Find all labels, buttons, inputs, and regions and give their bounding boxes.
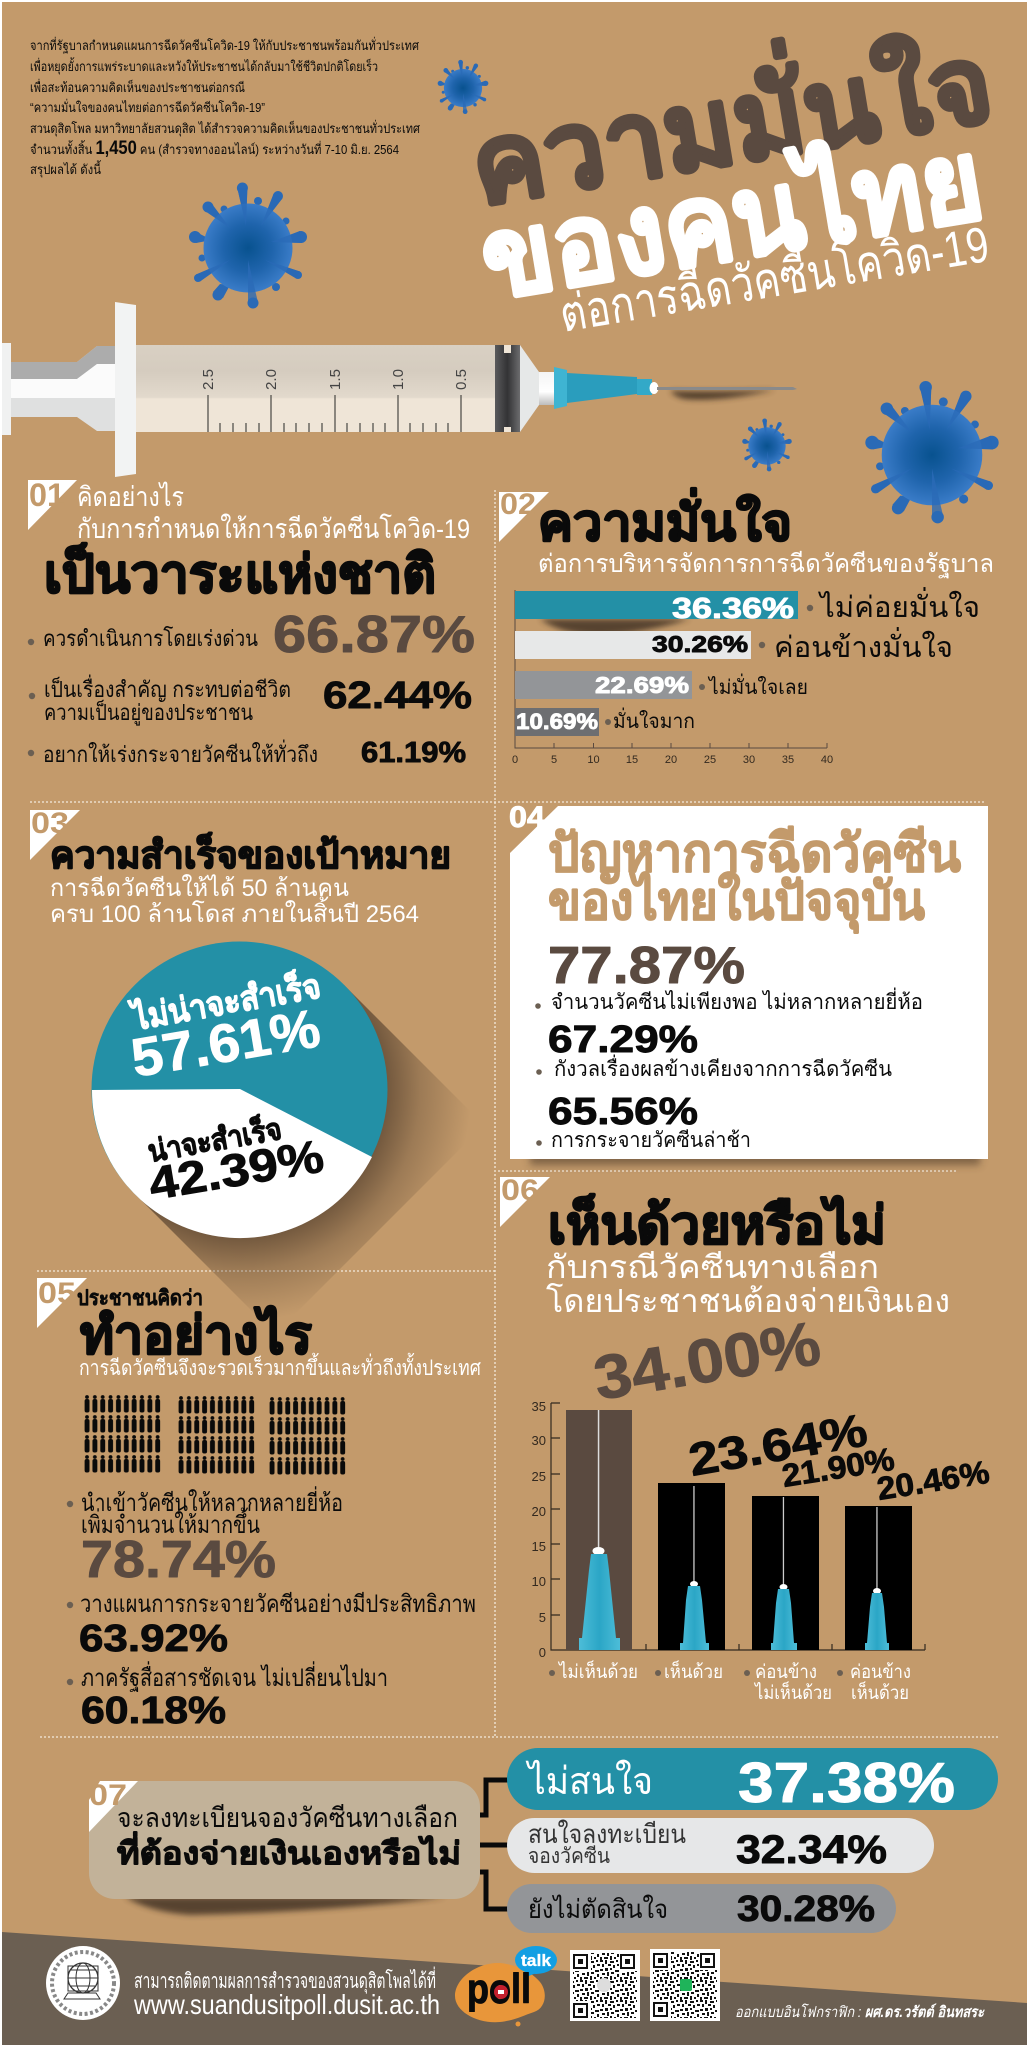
axis labels: 35 — [782, 754, 794, 766]
intro text block: สวนดุสิตโพล มหาวิทยาลัยสวนดุสิต ได้สำรวจความคิดเห็นของประชาชนทั่วประเทศ — [30, 119, 421, 137]
pill 37.38%: ไม่สนใจ — [525, 1760, 653, 1803]
pie label: not likely: ไม่น่าจะสำเร็จ — [127, 965, 324, 1038]
item 61.19% — [28, 737, 466, 769]
badge 02: 02 — [500, 488, 536, 521]
badge 04: 04 — [509, 801, 545, 834]
panel 07: registration — [89, 1748, 998, 1933]
panel 04: current problems — [509, 801, 988, 1165]
bar chart: confidence — [512, 587, 980, 766]
panel 06: agree or not — [500, 1174, 992, 1704]
bar 30.26 — [515, 627, 953, 664]
pie label: not likely — [127, 965, 324, 1089]
subheading 05: การฉีดวัคซีนจึงจะรวดเร็วมากขึ้นและทั่วถึงทั้งประเทศ — [79, 1353, 482, 1380]
item 63.92% — [67, 1591, 476, 1660]
heading 06: เห็นด้วยหรือไม่ — [548, 1194, 886, 1255]
bar 10.69 — [515, 707, 695, 736]
intro text block: “ความมั่นใจของคนไทยต่อการฉีดวัคซีนโควิด-19” — [30, 99, 265, 115]
connectors — [480, 1780, 509, 1909]
item 67.29% — [536, 1019, 892, 1081]
bar chart: agree or not — [532, 1309, 992, 1704]
heading 03: ความสำเร็จของเป้าหมาย — [50, 832, 451, 877]
panel 05: what should be done — [37, 1277, 482, 1732]
subheading 06 — [546, 1249, 950, 1319]
bar 10.69: 10.69% — [516, 709, 598, 734]
badge 03 — [30, 807, 80, 860]
item 61.19%: อยากให้เร่งกระจายวัคซีนให้ทั่วถึง — [43, 739, 318, 767]
axis labels: 20 — [665, 754, 677, 766]
bar 30.26: ค่อนข้างมั่นใจ — [774, 627, 953, 664]
syringe illustration: 2.5 — [200, 369, 217, 390]
value 34.00%: 34.00% — [589, 1309, 825, 1414]
syringe illustration: 1.5 — [327, 369, 344, 390]
pill 32.34%: 32.34% — [736, 1828, 887, 1872]
bar: rather agree — [845, 1506, 912, 1650]
question text: จะลงทะเบียนจองวัคซีนทางเลือก — [117, 1803, 458, 1833]
bar 36.36 — [515, 587, 980, 625]
question text: ที่ต้องจ่ายเงินเองหรือไม่ — [117, 1831, 461, 1871]
item 60.18%: 60.18% — [81, 1690, 226, 1732]
bar 10.69: มั่นใจมาก — [613, 707, 695, 733]
icon: small virus lower — [742, 418, 792, 471]
badge 06: 06 — [501, 1174, 539, 1207]
axes — [551, 1403, 925, 1650]
bar 22.69 — [515, 671, 808, 699]
badge 05: 05 — [38, 1277, 76, 1310]
category labels: ค่อนข้าง — [850, 1662, 911, 1683]
panel 02: confidence in government — [499, 488, 994, 766]
intro text block: เพื่อหยุดยั้งการแพร่ระบาดและหวังให้ประชาชนได้กลับมาใช้ชีวิตปกติโดยเร็ว — [30, 57, 378, 75]
heading 01 small: คิดอย่างไร — [77, 482, 184, 512]
subheading 02: ต่อการบริหารจัดการการฉีดวัคซีนของรัฐบาล — [538, 550, 994, 578]
syringe illustration: 0.5 — [453, 369, 470, 390]
pie label: likely: น่าจะสำเร็จ — [145, 1110, 284, 1169]
syringe illustration — [2, 302, 797, 477]
item 66.87%: 66.87% — [273, 606, 475, 664]
pill 30.28% — [507, 1884, 896, 1933]
item 67.29%: กังวลเรื่องผลข้างเคียงจากการฉีดวัคซีน — [554, 1054, 892, 1081]
bar chart: agree or not: 15 — [532, 1539, 546, 1554]
heading 04: ปัญหาการฉีดวัคซีน — [548, 825, 961, 884]
icon: university seal — [46, 1946, 120, 2020]
pie label: likely — [145, 1110, 327, 1210]
heading 01 small: กับการกำหนดให้การฉีดวัคซีนโควิด-19 — [77, 513, 470, 544]
value 23.64%: 23.64% — [685, 1403, 871, 1486]
item 62.44%: ความเป็นอยู่ของประชาชน — [44, 698, 253, 726]
QR code 2 — [650, 1949, 720, 2021]
axis labels: 40 — [821, 754, 833, 766]
footer text: สามารถติดตามผลการสำรวจของสวนดุสิตโพลได้ที่ — [134, 1966, 436, 1994]
bar: not agree — [566, 1410, 632, 1650]
pill 32.34%: สนใจลงทะเบียน — [528, 1819, 686, 1849]
icon: small virus top — [438, 60, 488, 114]
item 78.74%: เพิ่มจำนวนให้มากขึ้น — [81, 1507, 260, 1539]
category labels: ค่อนข้าง — [755, 1662, 817, 1683]
bar 30.26: 30.26% — [652, 631, 748, 657]
item 78.74% — [67, 1486, 343, 1589]
bar: agree — [658, 1483, 725, 1650]
icon: poll talk logo: talk — [521, 1951, 552, 1970]
pie chart — [92, 942, 484, 1334]
item 63.92%: 63.92% — [79, 1618, 228, 1660]
axis labels: 15 — [626, 754, 638, 766]
item 62.44% — [29, 674, 472, 726]
syringe illustration: 2.0 — [263, 369, 280, 390]
item 62.44%: 62.44% — [323, 675, 472, 717]
title line 1: ความมั่นใจ — [460, 6, 1001, 229]
item 77.87%: 77.87% — [548, 937, 745, 995]
pie label: likely: 42.39% — [145, 1130, 327, 1210]
pill 32.34%: จองวัคซีน — [528, 1845, 610, 1868]
heading 04 — [548, 825, 961, 934]
item 67.29%: 67.29% — [548, 1019, 698, 1061]
badge 01 — [28, 477, 77, 530]
bar chart: agree or not: 5 — [539, 1610, 546, 1625]
item 66.87%: ควรดำเนินการโดยเร่งด่วน — [43, 626, 258, 651]
icon: crowd of people — [84, 1395, 347, 1476]
category labels: เห็นด้วย — [851, 1680, 909, 1704]
icon: large virus left — [189, 182, 307, 308]
pill 37.38%: 37.38% — [738, 1751, 955, 1815]
badge 01: 01 — [29, 477, 65, 513]
axis labels — [512, 754, 833, 766]
category labels: ไม่เห็นด้วย — [753, 1680, 832, 1704]
pill 32.34% — [507, 1818, 934, 1873]
item 63.92%: วางแผนการกระจายวัคซีนอย่างมีประสิทธิภาพ — [80, 1591, 476, 1618]
axis labels: 10 — [587, 754, 600, 766]
heading 04: ของไทยในปัจจุบัน — [548, 871, 925, 934]
category labels: ไม่เห็นด้วย — [557, 1659, 638, 1683]
bar chart: agree or not: 20 — [532, 1504, 546, 1519]
item 65.56%: 65.56% — [548, 1091, 698, 1133]
question text — [117, 1803, 461, 1871]
bar 22.69: 22.69% — [595, 672, 689, 698]
pie label: not likely: 57.61% — [127, 998, 324, 1089]
title line 2: ของคนไทย — [472, 116, 991, 323]
heading 05 small: ประชาชนคิดว่า — [77, 1287, 203, 1310]
footer band — [2, 1932, 1027, 2045]
subheading 03: การฉีดวัคซีนให้ได้ 50 ล้านคน — [50, 874, 349, 902]
designer credit: ออกแบบอินโฟกราฟิก : ผศ.ดร.วรัตต์ อินทสระ — [735, 2003, 985, 2021]
icon: poll talk logo — [455, 1946, 557, 2026]
badge 07: 07 — [89, 1779, 127, 1812]
item 61.19%: 61.19% — [361, 737, 466, 769]
intro text block — [30, 37, 421, 178]
icon: large virus right — [865, 381, 999, 523]
item 62.44%: เป็นเรื่องสำคัญ กระทบต่อชีวิต — [44, 674, 291, 702]
heading 01 small — [77, 482, 470, 544]
footer text — [133, 1966, 440, 2020]
QR code 1 — [570, 1950, 640, 2021]
item 77.87%: จำนวนวัคซีนไม่เพียงพอ ไม่หลากหลายยี่ห้อ — [551, 987, 923, 1014]
subheading 06: กับกรณีวัคซีนทางเลือก — [546, 1249, 879, 1285]
badge 07 — [89, 1779, 138, 1832]
axis labels: 25 — [704, 754, 716, 766]
axis labels: 5 — [551, 754, 557, 766]
item 77.87% — [535, 937, 923, 1014]
intro text block: จากที่รัฐบาลกำหนดแผนการฉีดวัคซีนโควิด-19 ให้กับประชาชนพร้อมกันทั่วประเทศ — [30, 37, 420, 54]
dotted dividers — [30, 490, 998, 1737]
intro text block: สรุปผลได้ ดังนี้ — [30, 160, 101, 178]
axis labels: 0 — [512, 754, 518, 766]
footer text: www.suandusitpoll.dusit.ac.th — [133, 1989, 440, 2020]
item 60.18%: ภาครัฐสื่อสารชัดเจน ไม่เปลี่ยนไปมา — [81, 1661, 388, 1692]
heading 05 main: ทำอย่างไร — [80, 1305, 312, 1365]
intro text block: เพื่อสะท้อนความคิดเห็นของประชาชนต่อกรณี — [30, 78, 245, 95]
item 66.87% — [28, 606, 475, 664]
value 21.90%: 21.90% — [779, 1441, 897, 1494]
axis labels: 30 — [743, 754, 755, 766]
pill 30.28%: 30.28% — [737, 1888, 875, 1929]
heading 01 main: เป็นวาระแห่งชาติ — [44, 543, 436, 604]
bar chart: agree or not: 35 — [532, 1399, 546, 1414]
bar 22.69: ไม่มั่นใจเลย — [707, 673, 808, 699]
badge 02 — [499, 488, 549, 542]
syringe illustration: 1.0 — [390, 369, 407, 390]
item 65.56%: การกระจายวัคซีนล่าช้า — [551, 1129, 751, 1152]
bar chart: agree or not: 30 — [532, 1433, 546, 1448]
bar chart: agree or not: 25 — [532, 1469, 546, 1484]
bar chart: agree or not: 0 — [539, 1645, 546, 1660]
badge 05 — [37, 1277, 87, 1328]
item 65.56% — [536, 1091, 751, 1152]
subheading 03: ครบ 100 ล้านโดส ภายในสิ้นปี 2564 — [50, 896, 419, 928]
subheading 03 — [50, 874, 419, 928]
category labels — [549, 1659, 911, 1704]
bar chart: agree or not: 10 — [532, 1574, 546, 1589]
bar 36.36: ไม่ค่อยมั่นใจ — [818, 587, 980, 624]
intro text block: จำนวนทั้งสิ้น 1,450 คน (สำรวจทางออนไลน์) ระหว่างวันที่ 7-10 มิ.ย. 2564 — [30, 138, 399, 159]
badge 03: 03 — [31, 807, 69, 840]
bar: rather not agree — [752, 1496, 819, 1650]
heading 02: ความมั่นใจ — [538, 488, 792, 551]
badge 06 — [500, 1174, 550, 1227]
icon: poll talk logo: poll — [467, 1965, 531, 2012]
value 20.46%: 20.46% — [874, 1454, 992, 1507]
panel 03: goal success — [30, 807, 484, 1334]
item 78.74%: นำเข้าวัคซีนให้หลากหลายยี่ห้อ — [81, 1486, 343, 1517]
category labels: เห็นด้วย — [664, 1659, 723, 1683]
bar 36.36: 36.36% — [672, 593, 794, 625]
item 60.18% — [67, 1661, 388, 1732]
item 78.74%: 78.74% — [81, 1531, 276, 1589]
panel 01: national agenda — [28, 477, 475, 769]
pill 37.38% — [507, 1748, 998, 1815]
pill 30.28%: ยังไม่ตัดสินใจ — [528, 1894, 668, 1924]
question box — [89, 1781, 480, 1899]
subheading 06: โดยประชาชนต้องจ่ายเงินเอง — [546, 1283, 950, 1319]
